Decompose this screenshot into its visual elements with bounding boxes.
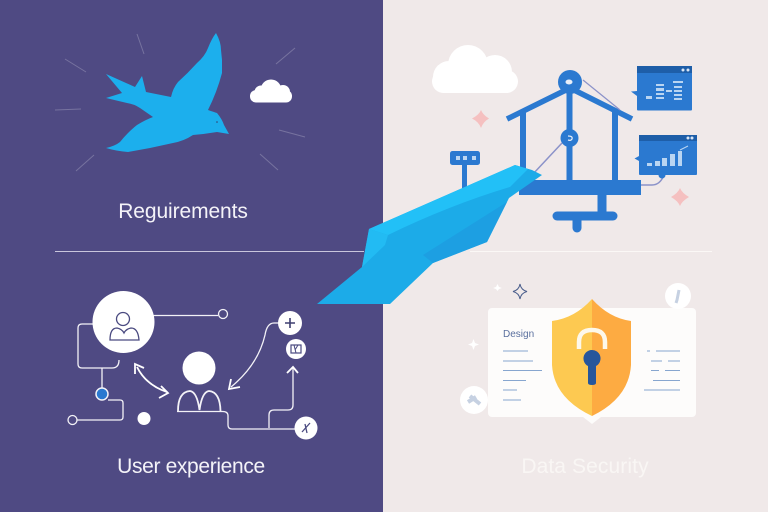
icon: pulley mid glyph bbox=[568, 136, 572, 140]
heading: data security: Data Security bbox=[521, 455, 649, 478]
arrow: to central user bbox=[229, 379, 240, 389]
icon: connector lines bbox=[77, 316, 298, 429]
icon: tool badge bbox=[294, 416, 318, 440]
icon: house structure bbox=[507, 80, 664, 228]
icon: small signpost bbox=[450, 151, 480, 192]
icon: central user bbox=[178, 352, 220, 411]
heading: requirements: Reguirements bbox=[118, 200, 248, 223]
icon: pink sparkle left bbox=[472, 110, 489, 128]
icon: white dot bbox=[138, 412, 150, 425]
icon: small circle top bbox=[218, 310, 228, 318]
heading: user experience: User experience bbox=[117, 455, 265, 478]
icon: plus badge bbox=[278, 311, 302, 335]
icon: house top pulley bbox=[558, 70, 582, 94]
panel: left background bbox=[0, 0, 383, 512]
icon: keyhole bbox=[583, 350, 601, 385]
text lines left bbox=[503, 351, 542, 400]
card: document bbox=[488, 308, 696, 417]
icon: shield bbox=[552, 299, 631, 416]
icon: pink sparkle right bbox=[671, 188, 689, 206]
icon: user outline in badge bbox=[110, 312, 139, 340]
icon: blue node bbox=[96, 388, 108, 400]
arrow: paper plane connector bbox=[317, 165, 542, 304]
icon: house mid pulley bbox=[560, 129, 578, 147]
icon: small map badge bbox=[286, 339, 306, 359]
icon: top right badge bbox=[665, 283, 691, 309]
icon: radiating lines bbox=[55, 34, 305, 171]
icon: bar chart window bbox=[634, 135, 697, 178]
text lines right bbox=[644, 351, 680, 390]
icon: white plus sparkle bbox=[468, 339, 479, 350]
icon: white sparkle top bbox=[493, 284, 502, 291]
icon: large cloud bbox=[432, 45, 518, 93]
icon: diagram window bbox=[631, 66, 692, 110]
icon: bird eye bbox=[216, 121, 218, 123]
icon: star outline bbox=[513, 284, 527, 299]
icon: cloud bbox=[250, 80, 292, 102]
panel: right background bbox=[383, 0, 768, 512]
arrow: upward bbox=[287, 367, 298, 373]
icon: small circle bottom bbox=[68, 416, 77, 424]
icon: bird bbox=[106, 33, 229, 152]
icon: large user badge bbox=[92, 291, 154, 353]
panel: user experience bbox=[68, 291, 318, 478]
icon: bottom left badge bbox=[460, 386, 488, 414]
card pointer bbox=[583, 417, 601, 424]
icon: pulley top eye bbox=[566, 80, 572, 84]
icon: padlock shackle bbox=[579, 330, 605, 349]
panel: data security bbox=[460, 283, 696, 478]
panel: architecture bbox=[432, 45, 697, 228]
panel: requirements bbox=[55, 33, 305, 223]
arrow: double between users bbox=[135, 364, 168, 398]
text: design label: Design bbox=[503, 329, 534, 340]
